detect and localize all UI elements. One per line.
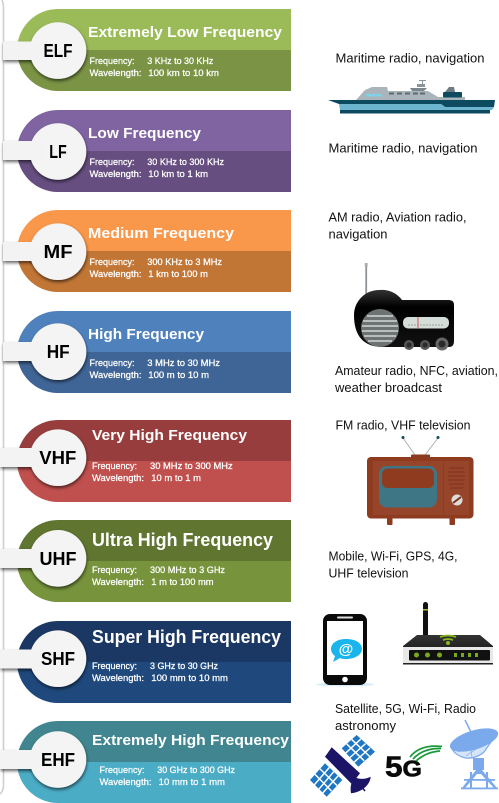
details: EHF: 30 GHz to 300 GHz <box>157 765 235 775</box>
icon: radio telescope dish <box>447 720 499 789</box>
panel: LF <box>3 110 291 192</box>
text: MF uses: AM radio, Aviation radio, <box>328 210 466 225</box>
details: MF: Frequency: <box>90 257 134 267</box>
details: EHF: 10 mm to 1 mm <box>159 777 225 787</box>
details: HF: 3 MHz to 30 MHz <box>147 358 221 368</box>
text: MF uses <box>328 210 466 241</box>
icon: radio <box>354 263 454 350</box>
panel: HF <box>3 311 291 393</box>
panel: UHF <box>0 520 291 602</box>
text: VHF uses: FM radio, VHF television <box>336 417 470 432</box>
text: UHF uses <box>328 549 458 580</box>
heading: HF: High Frequency <box>88 326 205 343</box>
details: MF: 300 KHz to 3 MHz <box>147 257 223 267</box>
text: MF uses: navigation <box>328 226 388 241</box>
details: VHF: 30 MHz to 300 MHz <box>150 461 233 471</box>
details: HF <box>90 358 221 380</box>
details: ELF: Frequency: <box>90 56 134 66</box>
panel: ELF <box>3 9 291 91</box>
text: ELF uses: Maritime radio, navigation <box>336 51 484 66</box>
label: MF: MF <box>44 241 72 262</box>
details: UHF: Frequency: <box>92 565 137 575</box>
details: LF: Wavelength: <box>90 169 142 179</box>
details: UHF <box>92 565 226 587</box>
label: LF: LF <box>49 141 67 162</box>
details: LF: 30 KHz to 300 KHz <box>147 157 224 167</box>
details: SHF: Frequency: <box>92 661 137 671</box>
vertical spine line <box>0 0 4 794</box>
details: VHF: Frequency: <box>92 461 137 471</box>
label: VHF: VHF <box>39 447 76 468</box>
details: LF: 10 km to 1 km <box>148 169 208 179</box>
text: UHF uses: Mobile, Wi-Fi, GPS, 4G, <box>328 549 458 564</box>
text: HF uses <box>334 363 498 395</box>
heading: ELF: Extremely Low Frequency <box>88 24 283 41</box>
details: ELF: 3 KHz to 30 KHz <box>147 56 214 66</box>
icon: 5G logo <box>385 746 442 784</box>
label: EHF: EHF <box>41 749 75 770</box>
icon: smartphone <box>316 614 374 686</box>
icon: smartphone: @ <box>339 641 353 658</box>
details: EHF: Frequency: <box>100 765 144 775</box>
heading: MF: Medium Frequency <box>88 225 235 242</box>
panel: SHF <box>0 621 291 703</box>
label: ELF: ELF <box>44 40 72 61</box>
panel: EHF <box>0 721 291 803</box>
details: MF: Wavelength: <box>90 269 142 279</box>
details: HF: 100 m to 10 m <box>148 370 209 380</box>
details: UHF: Wavelength: <box>92 577 144 587</box>
label: UHF: UHF <box>40 548 76 569</box>
text: HF uses: weather broadcast <box>334 380 442 395</box>
details: HF: Wavelength: <box>90 370 142 380</box>
text: EHF uses <box>335 701 476 733</box>
heading: LF: Low Frequency <box>88 125 202 142</box>
details: HF: Frequency: <box>90 358 134 368</box>
panel: MF <box>3 210 291 292</box>
text: UHF uses: UHF television <box>328 565 408 580</box>
details: UHF: 300 MHz to 3 GHz <box>150 565 226 575</box>
details: UHF: 1 m to 100 mm <box>151 577 214 587</box>
icon: 5G logo: 5G <box>385 752 422 784</box>
details: EHF: Wavelength: <box>100 777 152 787</box>
details: SHF: 3 GHz to 30 GHz <box>150 661 218 671</box>
icon: ship <box>328 80 495 114</box>
text: EHF uses: Satellite, 5G, Wi-Fi, Radio <box>335 701 476 716</box>
details: MF: 1 km to 100 m <box>148 269 208 279</box>
icon: television <box>367 436 474 525</box>
icon: satellite <box>310 735 375 797</box>
text: LF uses: Maritime radio, navigation <box>328 141 478 156</box>
heading: EHF: Extremely High Frequency <box>92 732 290 749</box>
details: LF: Frequency: <box>90 157 134 167</box>
heading: UHF: Ultra High Frequency <box>92 530 273 550</box>
details: EHF <box>100 765 235 787</box>
heading: VHF: Very High Frequency <box>92 427 248 444</box>
details: VHF <box>92 461 233 483</box>
heading: SHF: Super High Frequency <box>92 627 281 647</box>
details: MF <box>90 257 223 279</box>
details: VHF: 10 m to 1 m <box>151 473 201 483</box>
details: ELF <box>90 56 219 78</box>
details: LF <box>90 157 224 179</box>
details: SHF: 100 mm to 10 mm <box>151 673 228 683</box>
details: SHF: Wavelength: <box>92 673 144 683</box>
panel: VHF <box>0 420 291 502</box>
label: SHF: SHF <box>41 648 75 669</box>
details: ELF: 100 km to 10 km <box>148 68 219 78</box>
icon: wifi router <box>403 602 493 664</box>
details: ELF: Wavelength: <box>90 68 142 78</box>
label: HF: HF <box>47 341 70 362</box>
text: EHF uses: astronomy <box>335 718 396 733</box>
details: VHF: Wavelength: <box>92 473 144 483</box>
details: SHF <box>92 661 228 683</box>
